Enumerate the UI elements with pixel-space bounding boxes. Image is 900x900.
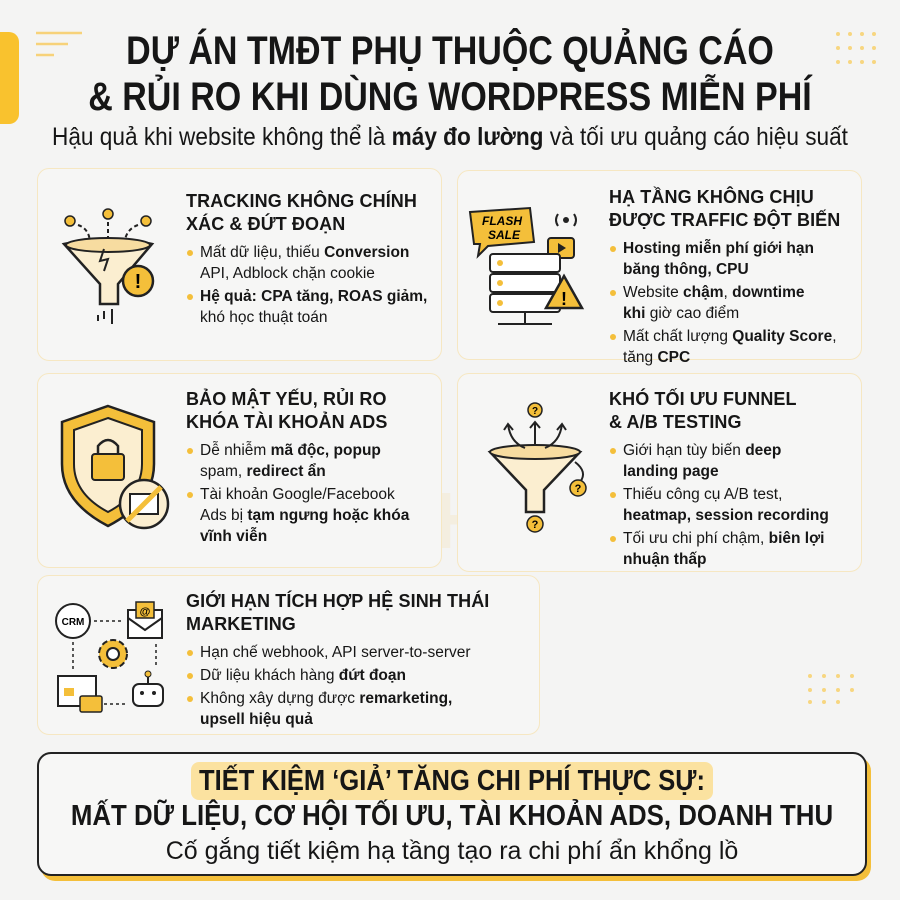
text: integration	[186, 590, 489, 728]
callout line 1: TIẾT KIỆM ‘GIẢ’ TĂNG CHI PHÍ THỰC SỰ:	[199, 765, 705, 797]
text: funnel AB: Thiếu công cụ A/B test,	[623, 486, 782, 503]
text: infrastructure: tăng CPC	[623, 349, 690, 366]
icon: funnel question: ?	[575, 483, 582, 495]
panel: integration	[37, 575, 540, 735]
icon: server flash sale: !	[561, 289, 567, 309]
watermark: LIGHT	[300, 476, 540, 565]
icon: broken funnel: !	[135, 271, 141, 293]
callout line 2: MẤT DỮ LIỆU, CƠ HỘI TỐI ƯU, TÀI KHOẢN ADS, DOANH THU	[71, 800, 833, 832]
text: infrastructure: Hosting miễn phí giới hạn	[623, 240, 814, 257]
panel: tracking	[37, 168, 442, 361]
icon: funnel question: ?	[532, 519, 539, 531]
subtitle: Hậu quả khi website không thể là máy đo lường và tối ưu quảng cáo hiệu suất	[52, 123, 848, 151]
decoration: dots top-right	[836, 32, 876, 64]
text: infrastructure	[609, 186, 840, 366]
text: funnel AB: Tối ưu chi phí chậm, biên lợi	[623, 530, 824, 547]
icon: ecosystem	[55, 601, 164, 713]
decoration: lines top-left	[36, 32, 82, 56]
text: integration: upsell hiệu quả	[200, 711, 313, 728]
text: funnel AB: heatmap, session recording	[623, 507, 829, 524]
decoration: dots bottom-right	[808, 674, 854, 704]
icon: server flash sale: FLASH	[482, 214, 522, 228]
icon: broken funnel	[62, 208, 154, 324]
text: funnel AB: nhuận thấp	[623, 551, 707, 568]
title: & RỦI RO KHI DÙNG WORDPRESS MIỄN PHÍ	[88, 75, 812, 119]
icon: funnel question	[488, 402, 587, 533]
icon: server flash sale: SALE	[488, 228, 521, 242]
text: integration: Không xây dựng được remarketing,	[200, 690, 452, 707]
text: security: Dễ nhiễm mã độc, popup	[200, 442, 381, 459]
text: security: vĩnh viễn	[200, 528, 267, 545]
text: security: spam, redirect ẩn	[200, 463, 326, 480]
text: tracking: Hệ quả: CPA tăng, ROAS giảm,	[200, 288, 427, 305]
title	[88, 28, 812, 119]
text: infrastructure: băng thông, CPU	[623, 261, 749, 278]
decoration: left yellow tab	[0, 32, 19, 124]
text: funnel AB: KHÓ TỐI ƯU FUNNEL	[609, 389, 797, 409]
text: security: KHÓA TÀI KHOẢN ADS	[186, 412, 387, 432]
text: integration: MARKETING	[186, 614, 296, 634]
text: integration: GIỚI HẠN TÍCH HỢP HỆ SINH THÁI	[186, 591, 489, 611]
text: tracking	[186, 190, 427, 326]
icon: ecosystem: CRM	[62, 617, 84, 628]
text: integration: Hạn chế webhook, API server-to-server	[200, 644, 471, 661]
text: infrastructure: HẠ TẦNG KHÔNG CHỊU	[609, 187, 814, 207]
text: infrastructure: Mất chất lượng Quality Score,	[623, 328, 837, 345]
callout: conclusion	[37, 752, 867, 876]
text: infrastructure: ĐƯỢC TRAFFIC ĐỘT BIẾN	[609, 210, 840, 230]
icon: shield lock	[60, 404, 170, 530]
text: funnel AB: Giới hạn tùy biến deep	[623, 442, 781, 459]
text: infrastructure: khi giờ cao điểm	[623, 305, 739, 322]
callout line 3: Cố gắng tiết kiệm hạ tầng tạo ra chi phí ẩn khổng lồ	[166, 837, 738, 865]
text: funnel AB	[609, 388, 829, 568]
text: tracking: Mất dữ liệu, thiếu Conversion	[200, 244, 409, 261]
text: infrastructure: Website chậm, downtime	[623, 284, 804, 301]
panel: funnel AB	[457, 373, 862, 572]
icon: ecosystem: @	[140, 606, 151, 618]
text: security: Tài khoản Google/Facebook	[200, 486, 395, 503]
text: tracking: XÁC & ĐỨT ĐOẠN	[186, 214, 345, 234]
text: tracking: API, Adblock chặn cookie	[200, 265, 375, 282]
callout heading highlight	[191, 762, 713, 800]
panel: infrastructure	[457, 170, 862, 360]
icon: server flash sale	[468, 207, 584, 325]
text: security	[186, 388, 410, 545]
panel: security	[37, 373, 442, 568]
text: funnel AB: & A/B TESTING	[609, 412, 742, 432]
text: security: BẢO MẬT YẾU, RỦI RO	[186, 389, 387, 409]
text: integration: Dữ liệu khách hàng đứt đoạn	[200, 667, 406, 684]
text: tracking: khó học thuật toán	[200, 309, 328, 326]
text: tracking: TRACKING KHÔNG CHÍNH	[186, 191, 417, 211]
text: security: Ads bị tạm ngưng hoặc khóa	[200, 507, 409, 524]
text: funnel AB: landing page	[623, 463, 719, 480]
title: DỰ ÁN TMĐT PHỤ THUỘC QUẢNG CÁO	[126, 29, 774, 73]
icon: funnel question: ?	[532, 406, 538, 417]
